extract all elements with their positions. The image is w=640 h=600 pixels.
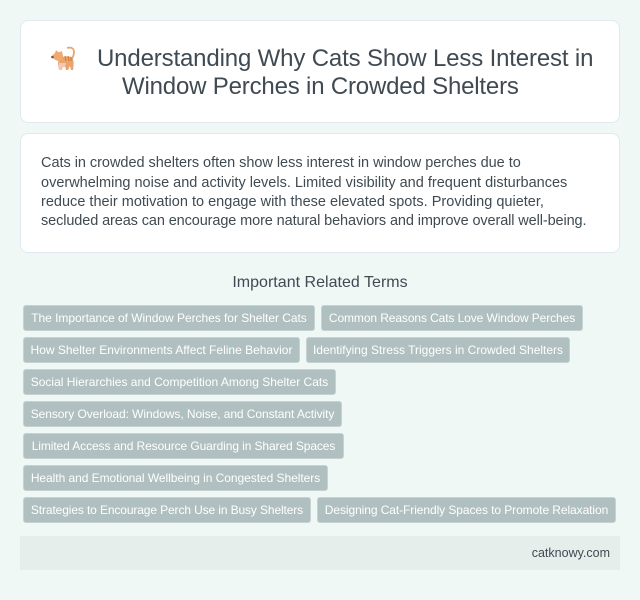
tag: Limited Access and Resource Guarding in Shared Spaces <box>32 439 335 453</box>
tag <box>317 497 616 523</box>
tag <box>321 305 583 331</box>
panel: description: Cats in crowded shelters often show less interest in window perches due to <box>41 155 521 171</box>
tag <box>23 465 328 491</box>
tag <box>23 337 300 363</box>
title: Understanding Why Cats Show Less Interest in <box>97 45 593 72</box>
tag: Common Reasons Cats Love Window Perches <box>329 311 575 325</box>
tag: The Importance of Window Perches for Shelter Cats <box>31 311 307 325</box>
icon: cat <box>51 46 75 70</box>
panel: description: reduce their motivation to engage with these elevated spots. Providing quieter, <box>41 194 544 210</box>
tag: Designing Cat-Friendly Spaces to Promote Relaxation <box>325 503 608 517</box>
tag <box>23 369 336 395</box>
tag <box>23 401 342 427</box>
tag <box>23 497 311 523</box>
panel: description <box>20 133 620 253</box>
panel: description: overwhelming noise and activity levels. Limited visibility and frequent disturbances <box>41 175 567 191</box>
tag: Strategies to Encourage Perch Use in Busy Shelters <box>31 503 303 517</box>
panel: description: secluded areas can encourage more natural behaviors and improve overall well-being. <box>41 213 586 229</box>
heading: important related terms: Important Related Terms <box>232 274 408 291</box>
term tags <box>23 305 616 523</box>
title: Window Perches in Crowded Shelters <box>122 73 519 100</box>
tag: Social Hierarchies and Competition Among Shelter Cats <box>31 375 328 389</box>
footer <box>20 536 620 570</box>
source: catknowy.com <box>532 546 610 560</box>
tag <box>23 433 344 459</box>
tag <box>23 305 315 331</box>
tag <box>306 337 570 363</box>
panel: title card <box>20 20 620 123</box>
title <box>97 45 593 100</box>
tag: How Shelter Environments Affect Feline Behavior <box>31 343 292 357</box>
tag: Health and Emotional Wellbeing in Congested Shelters <box>31 471 320 485</box>
tag: Identifying Stress Triggers in Crowded Shelters <box>313 343 563 357</box>
tag: Sensory Overload: Windows, Noise, and Constant Activity <box>31 407 334 421</box>
